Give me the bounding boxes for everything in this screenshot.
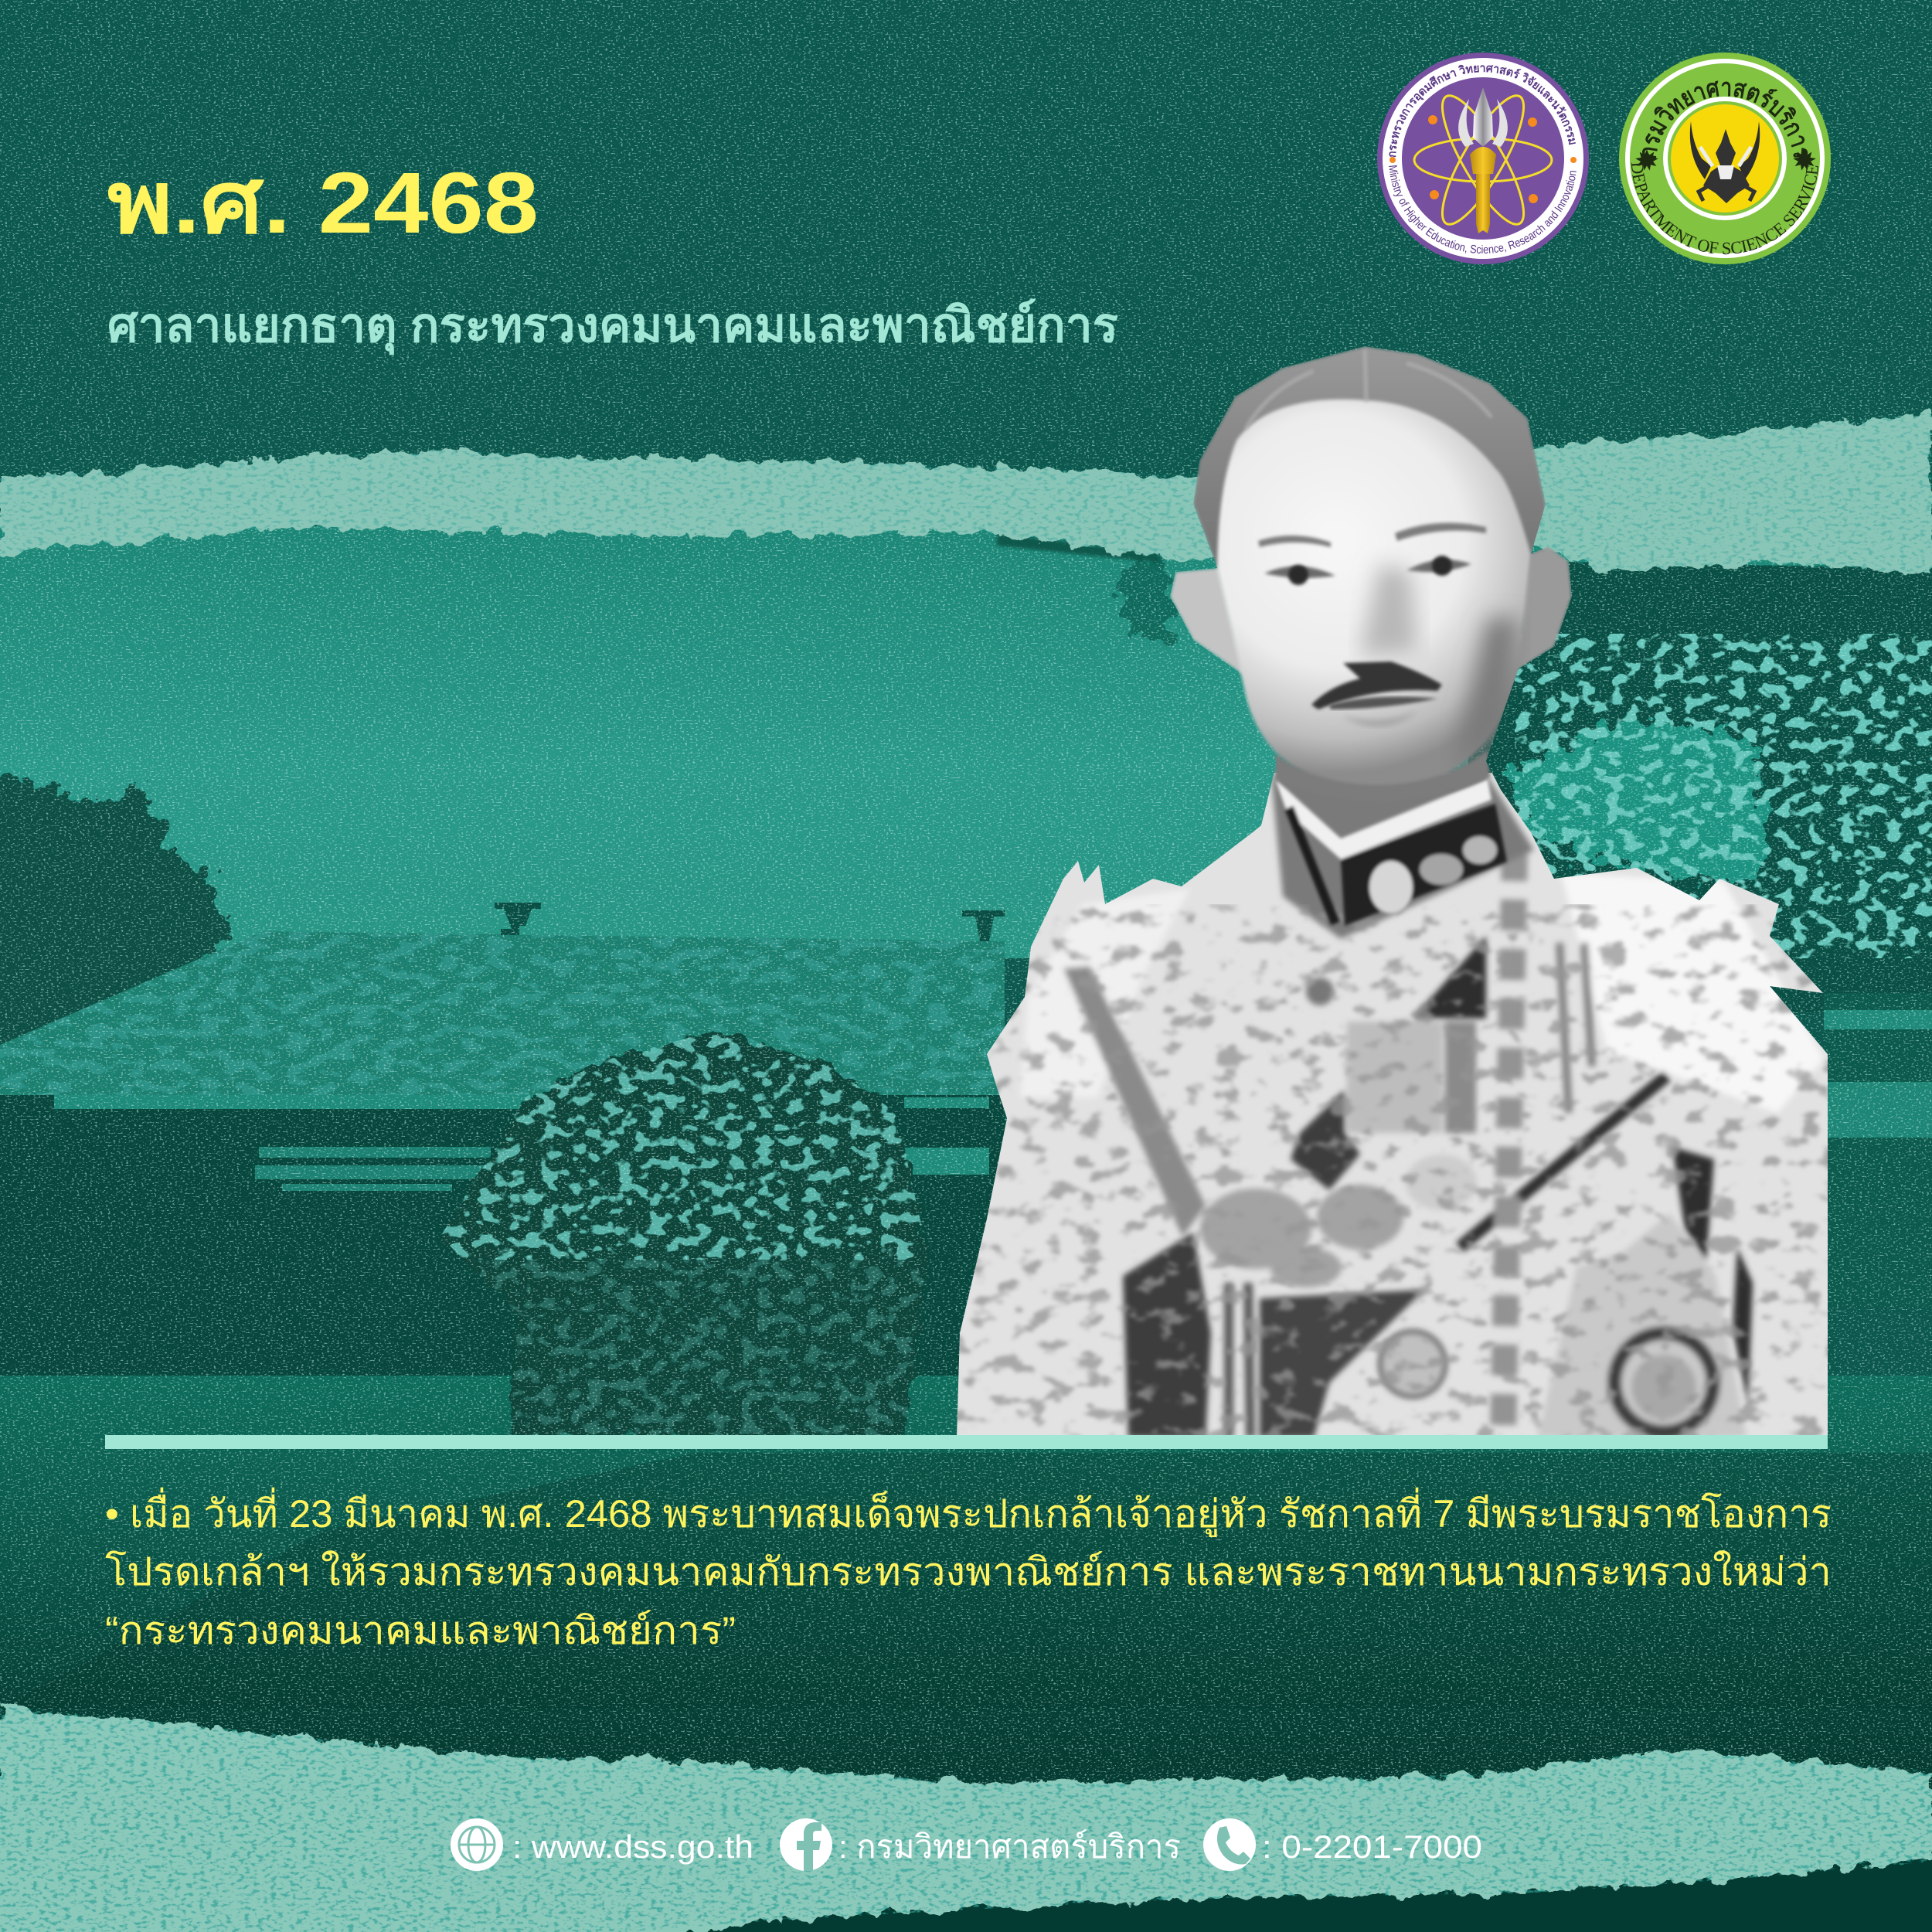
logo: Ministry of Higher Education, Science, Research and Innovation <box>1377 53 1589 264</box>
portrait: head <box>1170 346 1572 801</box>
logo text: Thai ministry name: กระทรวงการอุดมศึกษา วิทยาศาสตร์ วิจัยและนวัตกรรม <box>1389 65 1576 158</box>
scene: eave and stripes behind tree <box>904 1097 989 1175</box>
scene: lower shadow <box>0 1453 1932 1708</box>
body text <box>105 1488 1832 1652</box>
portrait: face and neck <box>1217 400 1531 791</box>
scene: leaf flecks right <box>1515 634 1932 958</box>
scene: leaves hanging behind head <box>1113 556 1175 641</box>
logo icon: electrons <box>1428 115 1538 203</box>
scene: right building <box>1824 993 1932 1306</box>
footer contacts <box>451 1818 1482 1871</box>
portrait: neck orders and chain <box>1200 1155 1477 1287</box>
website: : www.dss.go.th <box>512 1828 753 1865</box>
portrait: right jaw shadow <box>1453 618 1519 773</box>
portrait: shoulder highlights <box>1561 873 1824 1113</box>
scene: bright patch through the canopy <box>1507 719 1770 885</box>
scene: building base in shadow <box>0 1095 1005 1377</box>
scene: terrace stripes <box>255 1147 495 1191</box>
icon: facebook <box>780 1818 832 1871</box>
icon: phone <box>1203 1818 1256 1871</box>
body text: “กระทรวงคมนาคมและพาณิชย์การ” <box>105 1609 736 1652</box>
portrait: uniform base <box>943 773 1839 1445</box>
logo text: Thai department name: กรมวิทยาศาสตร์บริการ <box>1642 80 1808 158</box>
portrait: eyebrows <box>1258 523 1486 547</box>
portrait: nose shadow <box>1360 564 1418 657</box>
scene: roof eave highlight <box>54 1095 533 1109</box>
portrait: high collar base <box>1271 773 1534 939</box>
logo icon: garuda <box>1690 121 1760 203</box>
logo icon: trident blade and mace <box>1458 87 1508 233</box>
divider bar <box>105 1435 1828 1449</box>
facebook page: : กรมวิทยาศาสตร์บริการ <box>838 1828 1181 1865</box>
scene: foreground tree foliage flecks <box>433 1028 943 1437</box>
scene: roof ornaments <box>495 903 1005 941</box>
portrait: medal ribbon bar <box>1347 1022 1442 1133</box>
portrait: breast star <box>1538 1213 1747 1437</box>
scene: dark tree on the left <box>0 781 232 1059</box>
scene: right side tree canopy <box>1468 560 1932 1012</box>
portrait: neck shadow <box>1275 750 1490 801</box>
portrait: chest sash left <box>1063 966 1206 1236</box>
logo: Department of Science Service <box>1619 53 1831 264</box>
portrait: hair <box>1193 346 1546 618</box>
phone number: : 0-2201-7000 <box>1262 1828 1482 1865</box>
scene: wall and sky <box>0 526 1932 958</box>
icon: globe <box>451 1818 503 1871</box>
logo text: English ministry name: Ministry of Higher Education, Science, Research and Innovation <box>1389 165 1577 253</box>
portrait: man in ceremonial uniform <box>943 346 1839 1445</box>
title: year: พ.ศ. 2468 <box>107 155 539 251</box>
portrait: mouth <box>1329 696 1437 709</box>
subtitle: ศาลาแยกธาตุ กระทรวงคมนาคมและพาณิชย์การ <box>107 298 1118 355</box>
portrait: irises <box>1288 556 1452 585</box>
portrait: hair strands <box>1246 349 1492 429</box>
logo icon: stars <box>1635 149 1816 171</box>
portrait: collar detail <box>1275 779 1507 926</box>
portrait: ears <box>1170 568 1246 676</box>
torn paper strip: upper <box>0 402 1932 587</box>
scene: foreground tree <box>440 1032 927 1437</box>
body text: โปรดเกล้าฯ ให้รวมกระทรวงคมนาคมกับกระทรวงพาณิชย์การ และพระราชทานนามกระทรวงใหม่ว่า <box>105 1550 1832 1594</box>
scene: roof tile mottling <box>0 927 1005 1097</box>
portrait: uniform mottling <box>951 904 1832 1437</box>
portrait: vertical lapel embroidery <box>1503 850 1515 1437</box>
logo icon: atom orbits <box>1414 87 1552 233</box>
logo text: English department name: DEPARTMENT OF SCIENCE SERVICE <box>1631 162 1818 255</box>
portrait: moustache <box>1311 662 1442 709</box>
scene: tiled roof <box>0 931 1005 1095</box>
torn paper strip: lower <box>0 1692 1932 1932</box>
body text: • เมื่อ วันที่ 23 มีนาคม พ.ศ. 2468 พระบาทสมเด็จพระปกเกล้าเจ้าอยู่หัว รัชกาลที่ 7 มีพระบรมราชโองการ <box>105 1488 1832 1537</box>
portrait: eyes <box>1264 560 1471 578</box>
photo: historic hall scene in teal duotone <box>0 526 1932 1932</box>
portrait: dark coat panels <box>1123 1233 1211 1437</box>
portrait: chain sash right <box>1460 1076 1667 1247</box>
scene: lawn and lower gradient <box>0 1376 1932 1932</box>
